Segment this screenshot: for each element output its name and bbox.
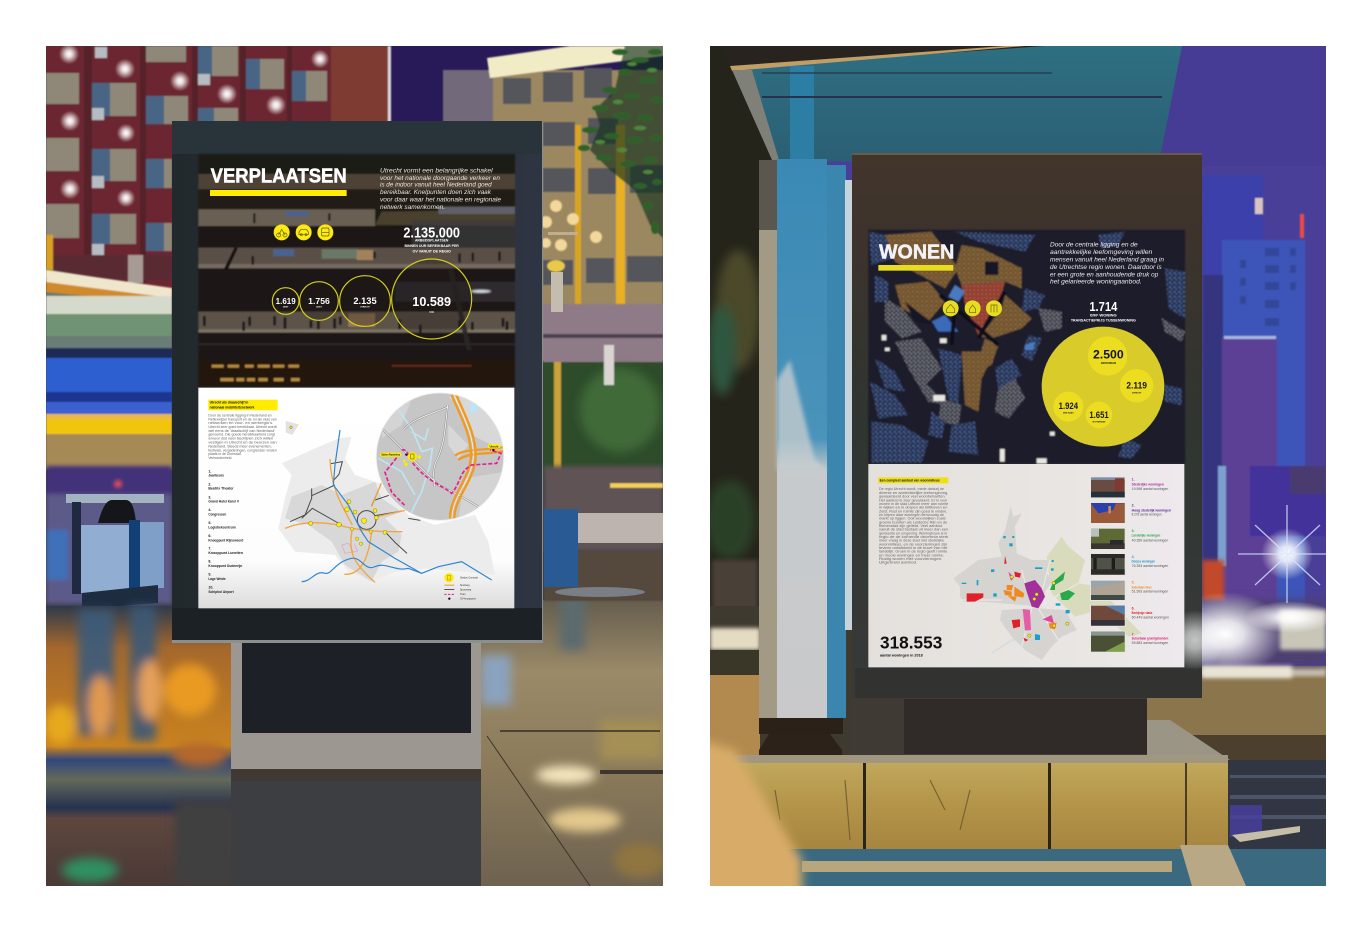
paragraph: gemeente en omgeving. Woningbouw is in (879, 531, 948, 535)
numbered list (208, 469, 243, 594)
bright car headlights (1202, 505, 1326, 681)
inset label: Utrecht: Utrecht (490, 445, 499, 448)
item 7: Suburbaan grondgebonden (1132, 637, 1168, 641)
paragraph: Uitgebreid aanbod. (879, 561, 917, 565)
shelter column foot (759, 718, 843, 759)
bubble: 2.119: UTRECHT (1132, 392, 1142, 394)
price statistic: TRANSACTIEPRIJS TUSSENWONING (1071, 318, 1136, 322)
bubble: 2.119 (1120, 369, 1153, 402)
motorways (285, 459, 407, 582)
regional map (278, 421, 495, 582)
trash bin (66, 494, 164, 609)
paragraph: en mooie woningen en meer ruimte. (879, 553, 944, 557)
numbered list: 8. (208, 560, 211, 564)
rail lines (290, 462, 420, 553)
poster: Wonen aerial map section (868, 230, 1185, 464)
bubble: 2.500: 2.500 (1093, 347, 1124, 361)
inset motorway (450, 395, 505, 518)
numbered list: 6. (208, 534, 211, 538)
poster stand pedestal (231, 640, 481, 886)
plaza background behind bin (46, 466, 172, 604)
paragraph: diverse en aantrekkelijke leefomgeving, (879, 491, 948, 495)
inset label: station: Station Papendorp (381, 454, 400, 457)
poster: Verplaatsen photo section (198, 154, 515, 387)
mauve arcade and trees (543, 304, 663, 472)
numbered list: Jaarbeurs (208, 474, 224, 478)
price statistic: €/M² WONING (1090, 313, 1117, 317)
title underline (878, 265, 953, 271)
paragraph: in wijken en in dorpen als Bilthoven en (879, 506, 948, 510)
intro text: aantrekkelijke leefomgeving willen (1050, 249, 1153, 256)
item 1: 1. (1132, 478, 1135, 482)
intro text: netwerk samenkomen. (380, 204, 445, 211)
aerial map (868, 230, 1185, 464)
paragraph: groene buurten als Leidsche Rijn en de (879, 520, 948, 524)
numbered list: Knooppunt Lunetten (208, 551, 243, 555)
paragraph: woonmilieus, en de voorzieningen zijn (879, 542, 948, 546)
paragraph: landelijk. Groen in de regio geeft ruimte (879, 550, 948, 554)
item 3 (1132, 529, 1168, 542)
paragraph: tevens ontwikkeld in de buurt van het (879, 546, 947, 550)
numbered list: 1. (208, 469, 211, 473)
numbered list: Knooppunt Oudenrijn (208, 564, 242, 568)
item 2: 8.278 aantal woningen (1132, 513, 1162, 517)
paragraph: regio de de komende decennia sterk (879, 535, 949, 539)
kiosk frame (852, 153, 1225, 698)
item 7 (1132, 632, 1168, 645)
scene: right bus shelter at night (700, 46, 1336, 896)
title: VERPLAATSEN (211, 166, 347, 188)
bubble: 1.924: 1.924 (1059, 401, 1078, 411)
item 5: 51.593 aantal woningen (1132, 590, 1168, 594)
numbered list: Logistiekcentrum (208, 525, 236, 529)
paragraph: Reflexwijzer transport en de rol als sluis van (208, 417, 277, 421)
paragraph (879, 487, 949, 565)
item 6: 6. (1132, 606, 1135, 610)
poster frame left (172, 121, 543, 643)
jobs statistic: OV VANUIT DE REGIO (412, 250, 451, 254)
bubble: 2.135: 2.135 (353, 296, 377, 306)
housing total: aantal woningen in 2018 (880, 653, 923, 657)
numbered list: Lage Weide (208, 577, 226, 581)
numbered list: 9. (208, 573, 211, 577)
item 2 (1132, 504, 1171, 517)
paragraph: gewaardeerd door veel woonbehoeften. (879, 495, 946, 499)
item 6 (1132, 606, 1169, 619)
blurred towers (1202, 175, 1326, 604)
bubble: 1.756 (300, 282, 338, 320)
jobs statistic (403, 225, 460, 254)
numbered list: Knooppunt Rijnsweerd (208, 538, 243, 542)
item 4 (1132, 555, 1168, 568)
intro text: Door de centrale ligging en de (1050, 242, 1138, 249)
paragraph: en blijven daar woningen eenvoudig de (879, 513, 944, 517)
paragraph: plaats in de Domstad. (208, 452, 242, 456)
intro text (380, 167, 501, 211)
jobs statistic: ARBEIDSPLAATSEN (415, 239, 449, 243)
intro text: er een grote en aanhoudende druk op (1050, 271, 1159, 278)
bubble: 10.589 (392, 259, 472, 339)
intro text: de Utrechtse regio wonen. Daardoor is (1050, 264, 1162, 271)
map legend: Spoorweg (460, 588, 472, 591)
map legend: OV-knooppunt (460, 598, 476, 601)
bubble: 1.756: ZEIST (316, 307, 323, 309)
location markers (309, 500, 387, 545)
bubble: 10.589: 10.589 (412, 295, 451, 309)
item 3: Landelijke woningen (1132, 534, 1160, 538)
street lamp (540, 200, 602, 312)
bubble chart (1042, 327, 1164, 447)
inset water (378, 410, 432, 518)
bubble: 2.135: UTRECHT (360, 307, 371, 309)
bubble: 1.924 (1053, 392, 1083, 422)
bubble: 1.619: 1.619 (276, 297, 296, 306)
red apartment building (46, 44, 391, 296)
icon: public transport (317, 224, 333, 240)
item 6: Bedrijvige stads (1132, 611, 1152, 615)
wet pavement right (481, 590, 666, 886)
right road (850, 666, 1326, 852)
item 4: 76.393 aantal woningen (1132, 564, 1168, 568)
paragraph (208, 413, 277, 460)
paragraph: binnenstad zijn geliefd. Veel aanbod (879, 524, 943, 528)
photo 6 (1090, 605, 1126, 627)
intro text: Utrecht vormt een belangrijke schakel (380, 167, 493, 174)
inset roads (382, 405, 478, 507)
numbered list: Schiphol Airport (208, 590, 234, 594)
numbered list: 4. (208, 508, 211, 512)
heading label (208, 400, 278, 410)
sky and trees (710, 46, 1326, 666)
item 4: Dorpse woningen (1132, 560, 1155, 564)
intro text: voor daar waar het nationale en regionale (380, 197, 501, 204)
paragraph: wonen in de stad Utrecht meer aan ruimte (879, 502, 949, 506)
photo 5 (1090, 580, 1126, 601)
paragraph: festivals, vergaderingen, congressen vinden (208, 448, 277, 452)
shelter roof (722, 46, 1182, 162)
paragraph: Verbondenheid. (208, 456, 232, 460)
scene: left street at night (44, 44, 666, 886)
item 2: Hoog stedelijk woningen (1132, 508, 1171, 512)
icon: bicycle (274, 224, 290, 240)
item 6: 60.449 aantal woningen (1132, 615, 1169, 619)
title: WONEN (879, 240, 954, 263)
inset tram (385, 450, 501, 506)
bubble: 2.135 (340, 276, 390, 326)
item 5: Suburbaan Vinex (1132, 585, 1152, 589)
bubble: 2.500: AMSTERDAM (1101, 362, 1116, 365)
item 5: 5. (1132, 581, 1135, 585)
inset map circle (376, 392, 505, 521)
bubble: 1.924: DEN HAAG (1063, 412, 1074, 415)
beige office building (443, 46, 663, 360)
photo 2 (1090, 502, 1126, 524)
numbered list: Congressen (208, 512, 226, 516)
item 1: Stedelijke woningen (1132, 482, 1164, 486)
paragraph: Utrecht zeer goed bereikbaar. Utrecht wordt (208, 425, 277, 429)
bubble: 1.651 (1086, 402, 1112, 428)
heading label: Een compleet aanbod van woonmilieus (880, 479, 940, 483)
photo 7 (1090, 631, 1126, 653)
bubble: 10.589: U10 (430, 312, 434, 314)
icon: tower (986, 300, 1002, 316)
photo 3 (1090, 528, 1126, 550)
map legend (444, 573, 478, 601)
map legend: Snelweg (460, 584, 470, 587)
intro text: het gelarieerde woningaanbod. (1050, 279, 1142, 286)
paragraph: Nederland. Steeds meer evenementen, (208, 444, 272, 448)
icon: car (296, 224, 312, 240)
paragraph: genoemd. Die goede bereikbaarheid zorgt (208, 433, 275, 437)
poster: Wonen neighbourhoods section (868, 464, 1184, 667)
jobs statistic: BINNEN UUR BEREIKBAAR PER (404, 244, 459, 248)
intro text: bereikbaar. Knelpunten doen zich vaak (380, 189, 492, 196)
paragraph: meer vraag in deze stad met stedelijke (879, 539, 944, 543)
paragraph: Door de centrale ligging in Nederland en (208, 413, 272, 417)
intro text: voor het nationale doorgaande verkeer en (380, 175, 500, 182)
numbered list: Beatrix Theater (208, 487, 234, 491)
neighbourhood map (953, 507, 1142, 660)
item 3: 40.359 aantal woningen (1132, 538, 1168, 542)
concrete plinth (726, 755, 1228, 850)
map legend: Tram (460, 593, 466, 596)
shelter side panel (759, 159, 852, 718)
street surface with markings (700, 740, 1326, 896)
item 1: 19.598 aantal woningen (1132, 487, 1168, 491)
heading label (878, 477, 948, 483)
item 2: 2. (1132, 504, 1135, 508)
paragraph: Zeist. Rust en ruimte zijn goed te vinden, (879, 509, 947, 513)
intro text (1050, 242, 1164, 286)
numbered list: 10. (208, 586, 213, 590)
neighbourhood legend (1132, 478, 1171, 645)
bubble: 1.619 (272, 288, 299, 314)
intro text: is de indoor vanuit heel Nederland goed (380, 182, 492, 189)
paragraph: De regio Utrecht wordt, mede dankzij de (879, 487, 944, 491)
photo 1 (1090, 477, 1126, 498)
bubble: 1.756: 1.756 (308, 296, 330, 306)
paragraph: vestigen in Utrecht en de beurzen van (208, 440, 277, 444)
poster: Verplaatsen map section (198, 388, 514, 608)
housing total: 318.553 (880, 632, 943, 652)
item 7: 7. (1132, 632, 1135, 636)
title underline (210, 190, 347, 196)
icon: apartment (943, 300, 959, 316)
jobs statistic: 2.135.000 (403, 225, 460, 241)
item 7: 59.883 aantal woningen (1132, 641, 1168, 645)
price statistic: 1.714 (1089, 300, 1117, 314)
heading label: Utrecht als draaischijf in (210, 401, 248, 405)
price statistic (1071, 300, 1136, 322)
icon: house (965, 300, 981, 316)
paragraph: wel eens de 'draaischijf van Nederland' (208, 429, 275, 433)
intro text: mensen vanuit heel Nederland graag in (1050, 257, 1164, 264)
numbered list: 5. (208, 521, 211, 525)
numbered list: 2. (208, 482, 211, 486)
kiosk base (904, 699, 1147, 754)
paragraph: netwerken en voor- en werkregio's. (208, 421, 273, 425)
left road (710, 606, 852, 755)
item 5 (1132, 581, 1168, 594)
photo 4 (1090, 553, 1126, 576)
station photo (198, 154, 515, 387)
bubble: 2.119: 2.119 (1126, 381, 1147, 391)
paragraph: markt op liggen. Ook woonwijken zoals (879, 517, 946, 521)
tree foliage (578, 46, 663, 238)
far right street with fence (544, 466, 663, 601)
paragraph: ervoor dat veel bedrijven zich willen (208, 437, 274, 441)
numbered list: 7. (208, 547, 211, 551)
numbered list: Grand Hotel Karel V (208, 500, 239, 504)
bubble: 1.651: 1.651 (1089, 410, 1109, 420)
paragraph: Het aanbod is zeer gevarieerd. Er is voor (879, 498, 948, 502)
bubble chart (272, 259, 472, 339)
rivers (302, 430, 492, 582)
bubble: 1.619: ZEIST (283, 307, 289, 309)
paragraph: vanuit de stad bestaat uit meer dan een (879, 528, 949, 532)
item 1 (1132, 478, 1168, 491)
item 3: 3. (1132, 529, 1135, 533)
bubble: 2.500 (1088, 336, 1127, 376)
map legend: Station Centraal (460, 577, 478, 580)
wet pavement left (44, 606, 235, 886)
bubble: 1.651: ROTTERDAM (1093, 420, 1106, 423)
paragraph: Rustig wonen met voorzieningen. (879, 557, 942, 561)
neighbourhood photos (1090, 477, 1126, 653)
numbered list: 3. (208, 495, 211, 499)
item 4: 4. (1132, 555, 1135, 559)
heading label: nationaal mobiliteitsnetwerk (210, 405, 255, 409)
motion blurred light streaks (46, 269, 172, 470)
